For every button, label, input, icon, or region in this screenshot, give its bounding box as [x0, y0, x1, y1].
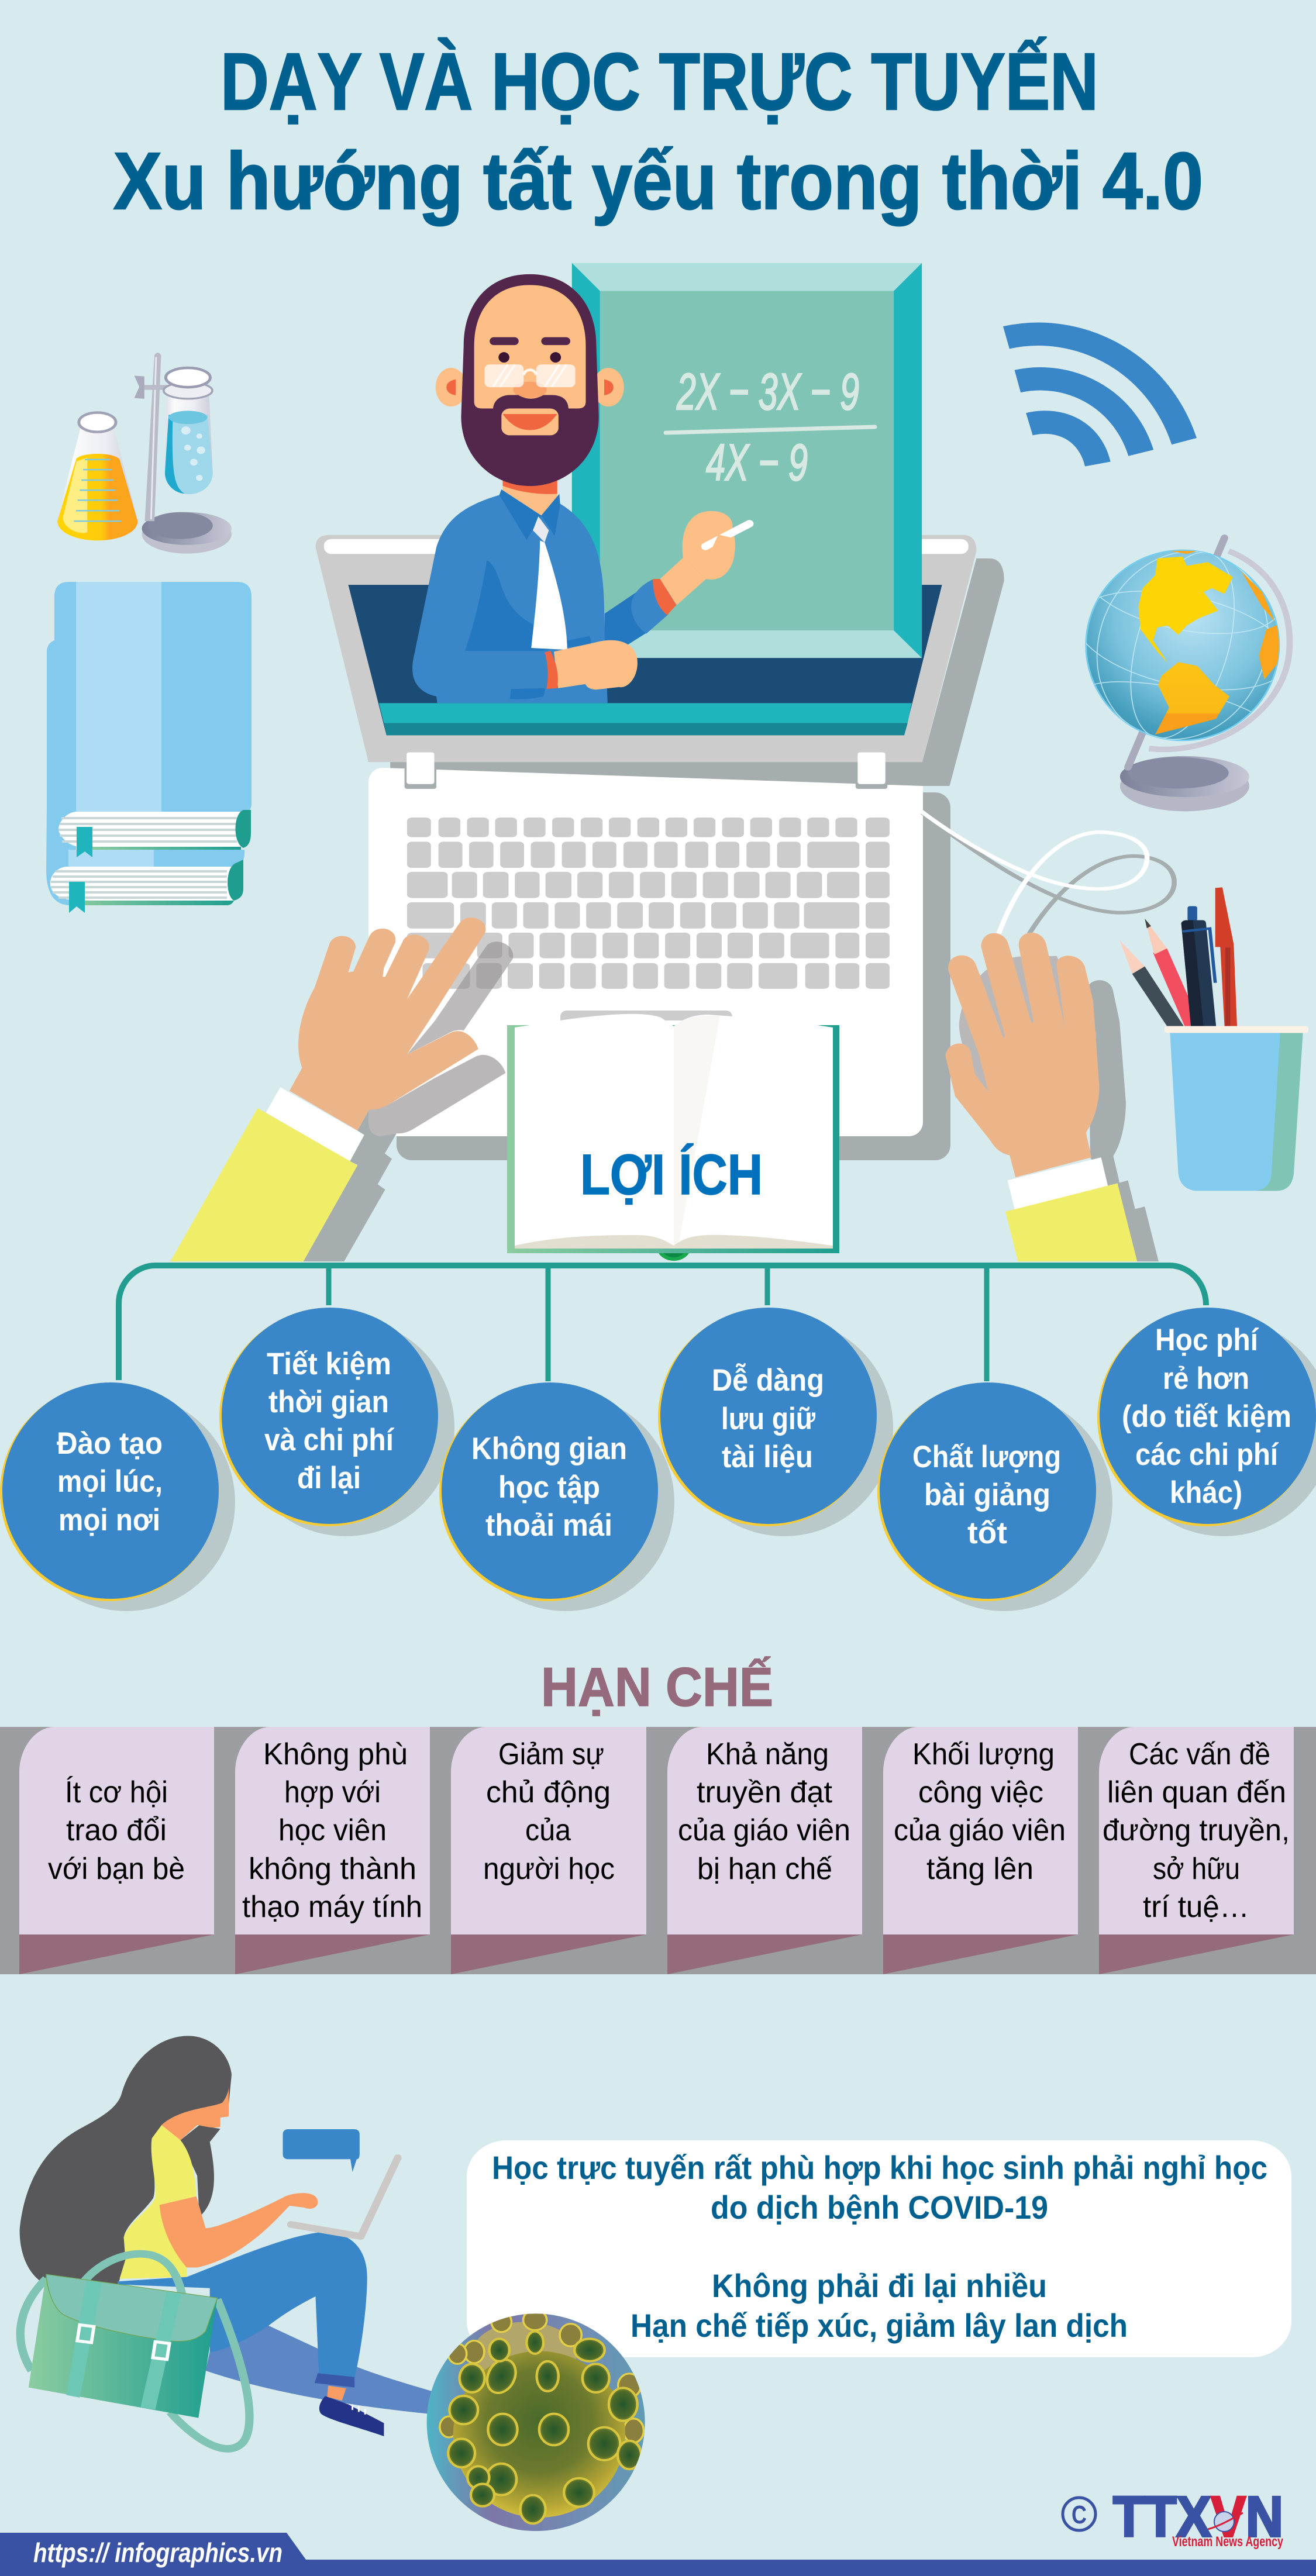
- title: DẠY VÀ HỌC TRỰC TUYẾN: [221, 37, 1098, 127]
- limitations banner: [0, 1727, 1316, 1974]
- limitation card 6: đường truyền,: [1103, 1813, 1290, 1847]
- limitation card 3: Giảm sự: [498, 1737, 604, 1771]
- benefit circle 4: Dễ dàng: [712, 1363, 824, 1398]
- callout: covid-19: Không phải đi lại nhiều: [712, 2267, 1047, 2304]
- benefit circle 5: tốt: [967, 1516, 1007, 1550]
- laptop screen with teacher and blackboard: [315, 263, 1004, 789]
- icon: speech bubble: [283, 2129, 360, 2172]
- limitation card 5: tăng lên: [926, 1852, 1033, 1886]
- left hand and sleeve: [170, 918, 513, 1261]
- student with laptop and bag: [20, 2036, 432, 2449]
- benefit circle 2: đi lại: [297, 1461, 361, 1495]
- limitation card 6: trí tuệ…: [1143, 1890, 1249, 1924]
- benefit circle 4: tài liệu: [722, 1440, 813, 1474]
- callout: covid-19: Hạn chế tiếp xúc, giảm lây lan dịch: [631, 2307, 1128, 2344]
- benefit circle 2: Tiết kiệm: [267, 1347, 391, 1381]
- benefit circle 6: (do tiết kiệm: [1122, 1399, 1291, 1434]
- limitation card 5: [883, 1727, 1078, 1974]
- benefit circle 2: [219, 1308, 454, 1536]
- benefit circle 5: Chất lượng: [912, 1440, 1061, 1474]
- title: [113, 37, 1203, 226]
- limitation card 2: thạo máy tính: [242, 1890, 422, 1924]
- logo: ttxvn: C: [1072, 2501, 1087, 2529]
- limitation card 4: [667, 1727, 862, 1974]
- limitation card 2: [235, 1727, 430, 1974]
- mouse cable: [905, 799, 1174, 933]
- benefit circle 6: rẻ hơn: [1163, 1361, 1249, 1396]
- limitation card 5: công việc: [918, 1775, 1043, 1809]
- benefit circle 4: [658, 1308, 893, 1536]
- right hand on mouse: [945, 933, 1159, 1261]
- limitation card 2: Không phù: [263, 1737, 408, 1771]
- benefit circle 6: các chi phí: [1135, 1437, 1279, 1472]
- tree connector lines: [119, 1263, 1206, 1381]
- benefit circle 3: Không gian: [471, 1432, 627, 1466]
- limitation card 3: người học: [483, 1852, 615, 1886]
- callout: covid-19: [467, 2140, 1291, 2357]
- limitation card 3: của: [525, 1813, 571, 1847]
- limitation card 6: sở hữu: [1153, 1852, 1240, 1886]
- benefit circle 5: [877, 1382, 1112, 1611]
- icon: wifi signal: [1006, 334, 1184, 464]
- blackboard formula: 4X − 9: [706, 433, 808, 491]
- limitation card 5: của giáo viên: [894, 1813, 1066, 1847]
- icon: pencil cup: [1119, 887, 1308, 1191]
- limitation card 1: Ít cơ hội: [65, 1775, 168, 1809]
- heading: lợi ích: LỢI ÍCH: [580, 1143, 763, 1206]
- laptop base and keyboard: [368, 768, 950, 1160]
- benefit circle 6: khác): [1170, 1475, 1242, 1510]
- heading: hạn chế: HẠN CHẾ: [541, 1656, 773, 1718]
- footer band with url: https:// infographics.vn: [33, 2537, 283, 2568]
- benefit circle 6: Học phí: [1155, 1323, 1259, 1357]
- limitation card 2: không thành: [249, 1852, 416, 1886]
- title: Xu hướng tất yếu trong thời 4.0: [113, 136, 1203, 226]
- blackboard formula: [666, 363, 875, 491]
- limitation card 2: học viên: [278, 1813, 387, 1847]
- open book: lợi ích: [507, 1011, 839, 1261]
- benefit circle 1: [0, 1382, 235, 1611]
- limitation card 4: bị hạn chế: [697, 1852, 832, 1886]
- limitation card 4: Khả năng: [706, 1737, 829, 1771]
- icon: laboratory flasks: [57, 353, 232, 554]
- benefit circle 2: và chi phí: [264, 1423, 395, 1457]
- limitation card 3: [451, 1727, 646, 1974]
- icon: stack of books: [46, 582, 252, 913]
- benefit circle 3: thoải mái: [485, 1508, 612, 1543]
- limitation card 1: với bạn bè: [48, 1852, 185, 1886]
- benefit circle 1: mọi nơi: [58, 1503, 160, 1537]
- benefit circle 2: thời gian: [268, 1385, 389, 1419]
- benefit circle 4: lưu giữ: [721, 1402, 816, 1436]
- benefit circle 3: [439, 1382, 674, 1611]
- benefit circle 5: bài giảng: [924, 1478, 1050, 1512]
- limitation card 2: hợp với: [284, 1775, 381, 1809]
- limitation card 4: của giáo viên: [678, 1813, 850, 1847]
- limitation card 1: trao đổi: [66, 1813, 167, 1847]
- laptop hinges: [405, 753, 887, 789]
- blackboard formula: 2X − 3X − 9: [676, 363, 859, 420]
- benefit circle 3: học tập: [498, 1470, 600, 1505]
- image: coronavirus: [427, 2310, 645, 2531]
- limitation card 5: Khối lượng: [912, 1737, 1055, 1771]
- blackboard: [572, 263, 922, 658]
- limitation card 6: [1099, 1727, 1294, 1974]
- screen bottom bar: [379, 703, 912, 735]
- logo: ttxvn: TTXVN: [1113, 2485, 1283, 2549]
- callout: covid-19: do dịch bệnh COVID-19: [711, 2189, 1048, 2226]
- limitation card 4: truyền đạt: [697, 1775, 833, 1809]
- footer band with url: [0, 2533, 1316, 2576]
- teacher: [412, 274, 749, 703]
- limitation card 1: [19, 1727, 214, 1974]
- callout: covid-19: Học trực tuyến rất phù hợp khi học sinh phải nghỉ học: [492, 2149, 1267, 2186]
- benefit circle 1: mọi lúc,: [57, 1464, 163, 1499]
- limitation card 6: Các vấn đề: [1129, 1737, 1270, 1771]
- icon: globe: [1085, 534, 1293, 812]
- limitation card 3: chủ động: [486, 1775, 611, 1809]
- benefit circle 6: [1097, 1308, 1316, 1536]
- limitation card 6: liên quan đến: [1107, 1775, 1286, 1809]
- benefit circle 1: Đào tạo: [57, 1426, 163, 1461]
